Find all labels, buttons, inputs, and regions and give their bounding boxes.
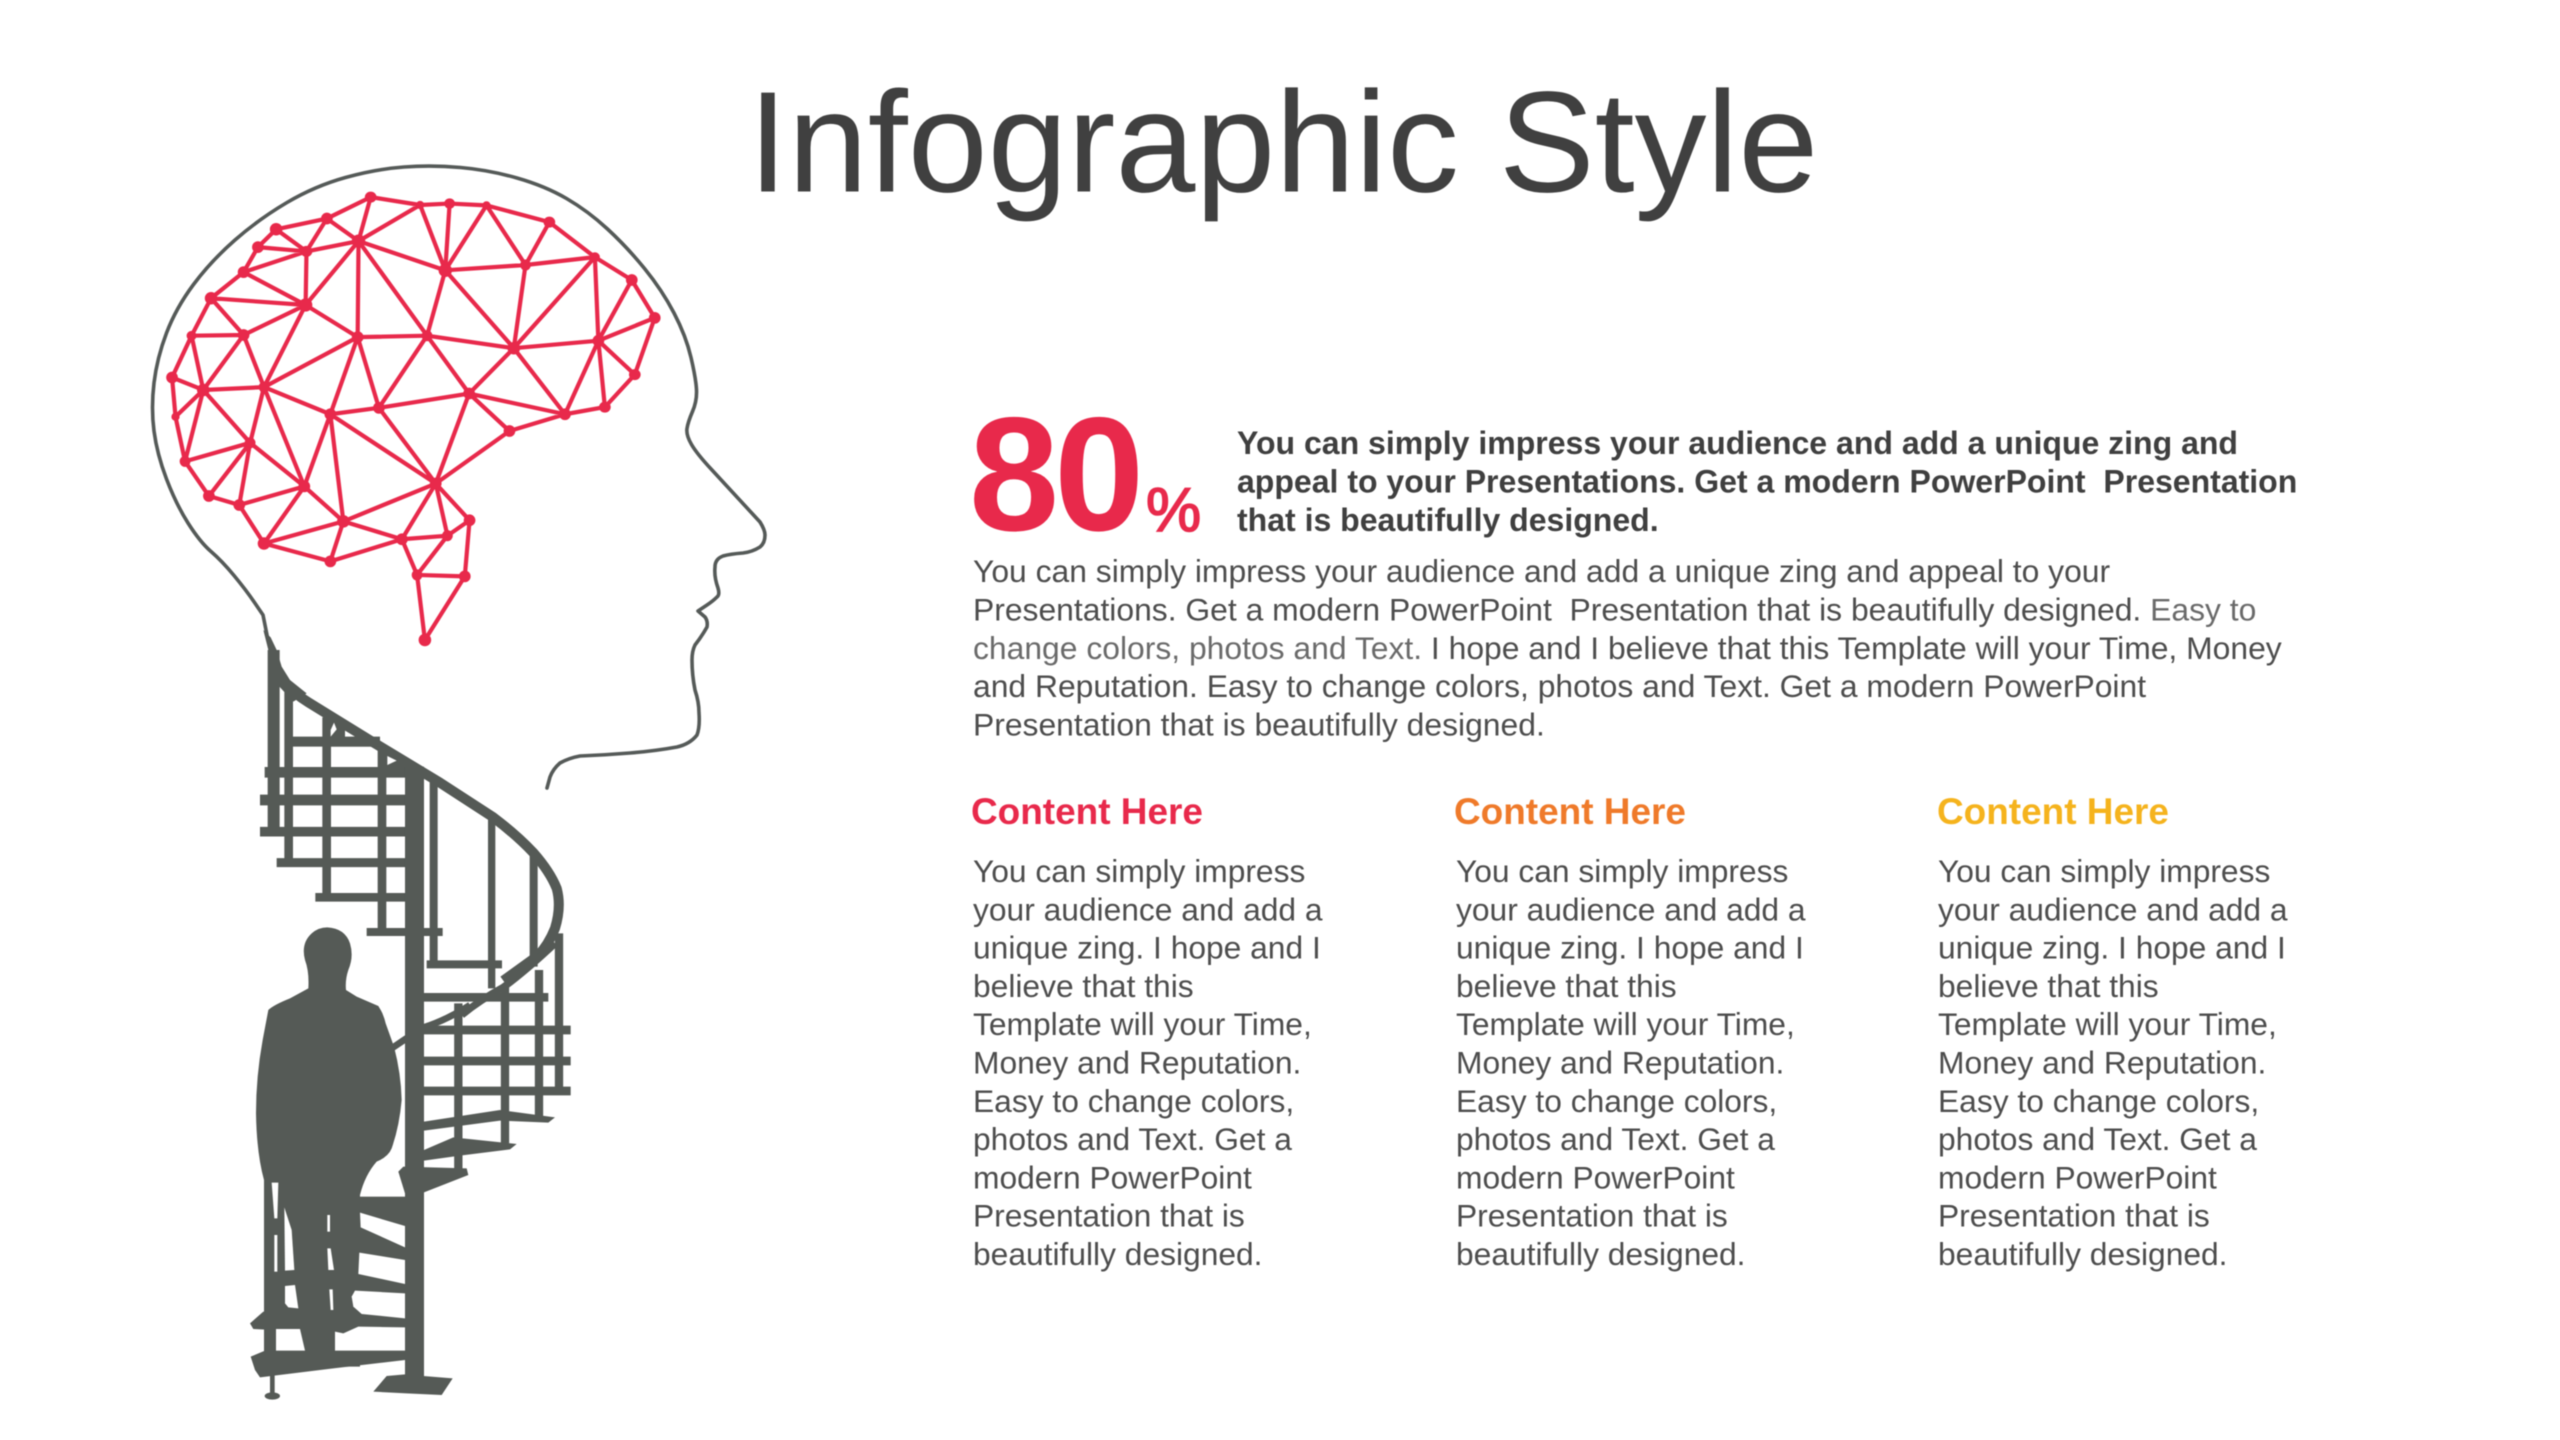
column 3 text: Template will your Time,	[1938, 1006, 2277, 1042]
spiral staircase, middle flight	[256, 927, 571, 1380]
column 1 text: Money and Reputation.	[973, 1044, 1301, 1080]
spiral staircase, lower flight and base	[250, 1183, 453, 1400]
column 1 heading: Content Here	[971, 791, 1203, 832]
column 1 text: modern PowerPoint	[973, 1159, 1252, 1195]
body paragraph	[973, 553, 2282, 743]
column 3 text	[1938, 853, 2288, 1272]
title: Infographic Style	[748, 62, 1818, 222]
spiral staircase, upper flight	[260, 630, 559, 1033]
column 1 text: Template will your Time,	[973, 1006, 1312, 1042]
column 3 heading: Content Here	[1937, 791, 2169, 832]
column 2 text: Template will your Time,	[1456, 1006, 1795, 1042]
column 3 text: Easy to change colors,	[1938, 1083, 2259, 1119]
column 3 text: You can simply impress	[1938, 853, 2270, 889]
column 3 text: modern PowerPoint	[1938, 1159, 2217, 1195]
body paragraph: Presentation that is beautifully designed.	[973, 707, 1545, 743]
column 1 text: Presentation that is	[973, 1198, 1245, 1234]
bold lead paragraph	[1237, 425, 2297, 538]
column 3 text: Money and Reputation.	[1938, 1044, 2266, 1080]
column 3 text: beautifully designed.	[1938, 1236, 2228, 1272]
column 2	[1454, 791, 1806, 1272]
column 1 text: beautifully designed.	[973, 1236, 1262, 1272]
column 3 text: photos and Text. Get a	[1938, 1121, 2257, 1157]
column 1	[971, 791, 1323, 1272]
column 3 text: Presentation that is	[1938, 1198, 2210, 1234]
column 1 text: your audience and add a	[973, 891, 1323, 927]
big stat: 80%: %	[1146, 476, 1201, 545]
column 2 heading: Content Here	[1454, 791, 1686, 832]
column 2 text: your audience and add a	[1456, 891, 1806, 927]
body paragraph: change colors, photos and Text. I hope and I believe that this Template will your Time, Money	[973, 630, 2282, 666]
head outline	[152, 166, 765, 788]
column 2 text: Presentation that is	[1456, 1198, 1728, 1234]
column 2 text: modern PowerPoint	[1456, 1159, 1735, 1195]
column 1 text: unique zing. I hope and I	[973, 930, 1321, 966]
column 2 text: You can simply impress	[1456, 853, 1788, 889]
column 2 text	[1456, 853, 1806, 1272]
column 2 text: beautifully designed.	[1456, 1236, 1746, 1272]
column 3 text: believe that this	[1938, 968, 2159, 1004]
column 2 text: photos and Text. Get a	[1456, 1121, 1775, 1157]
column 3 text: your audience and add a	[1938, 891, 2288, 927]
column 3 text: unique zing. I hope and I	[1938, 930, 2286, 966]
brain nodes	[167, 192, 660, 646]
body paragraph: and Reputation. Easy to change colors, photos and Text. Get a modern PowerPoint	[973, 668, 2146, 704]
column 2 text: unique zing. I hope and I	[1456, 930, 1804, 966]
column 1 text: believe that this	[973, 968, 1194, 1004]
bold lead paragraph: that is beautifully designed.	[1237, 502, 1659, 538]
big stat: 80%: 80	[969, 384, 1139, 565]
column 2 text: Easy to change colors,	[1456, 1083, 1777, 1119]
column 3	[1937, 791, 2288, 1272]
brain network	[167, 192, 660, 646]
bold lead paragraph: You can simply impress your audience and add a unique zing and	[1237, 425, 2238, 461]
body paragraph: You can simply impress your audience and add a unique zing and appeal to your	[973, 553, 2111, 589]
column 1 text: Easy to change colors,	[973, 1083, 1294, 1119]
column 2 text: Money and Reputation.	[1456, 1044, 1784, 1080]
column 1 text: You can simply impress	[973, 853, 1305, 889]
man silhouette	[256, 927, 402, 1367]
column 2 text: believe that this	[1456, 968, 1677, 1004]
bold lead paragraph: appeal to your Presentations. Get a modern PowerPoint Presentation	[1237, 464, 2297, 500]
column 1 text	[973, 853, 1323, 1272]
column 1 text: photos and Text. Get a	[973, 1121, 1292, 1157]
body paragraph: Presentations. Get a modern PowerPoint Presentation that is beautifully designed. Easy to	[973, 591, 2256, 627]
illustration: head with brain and spiral staircase	[152, 166, 765, 1400]
